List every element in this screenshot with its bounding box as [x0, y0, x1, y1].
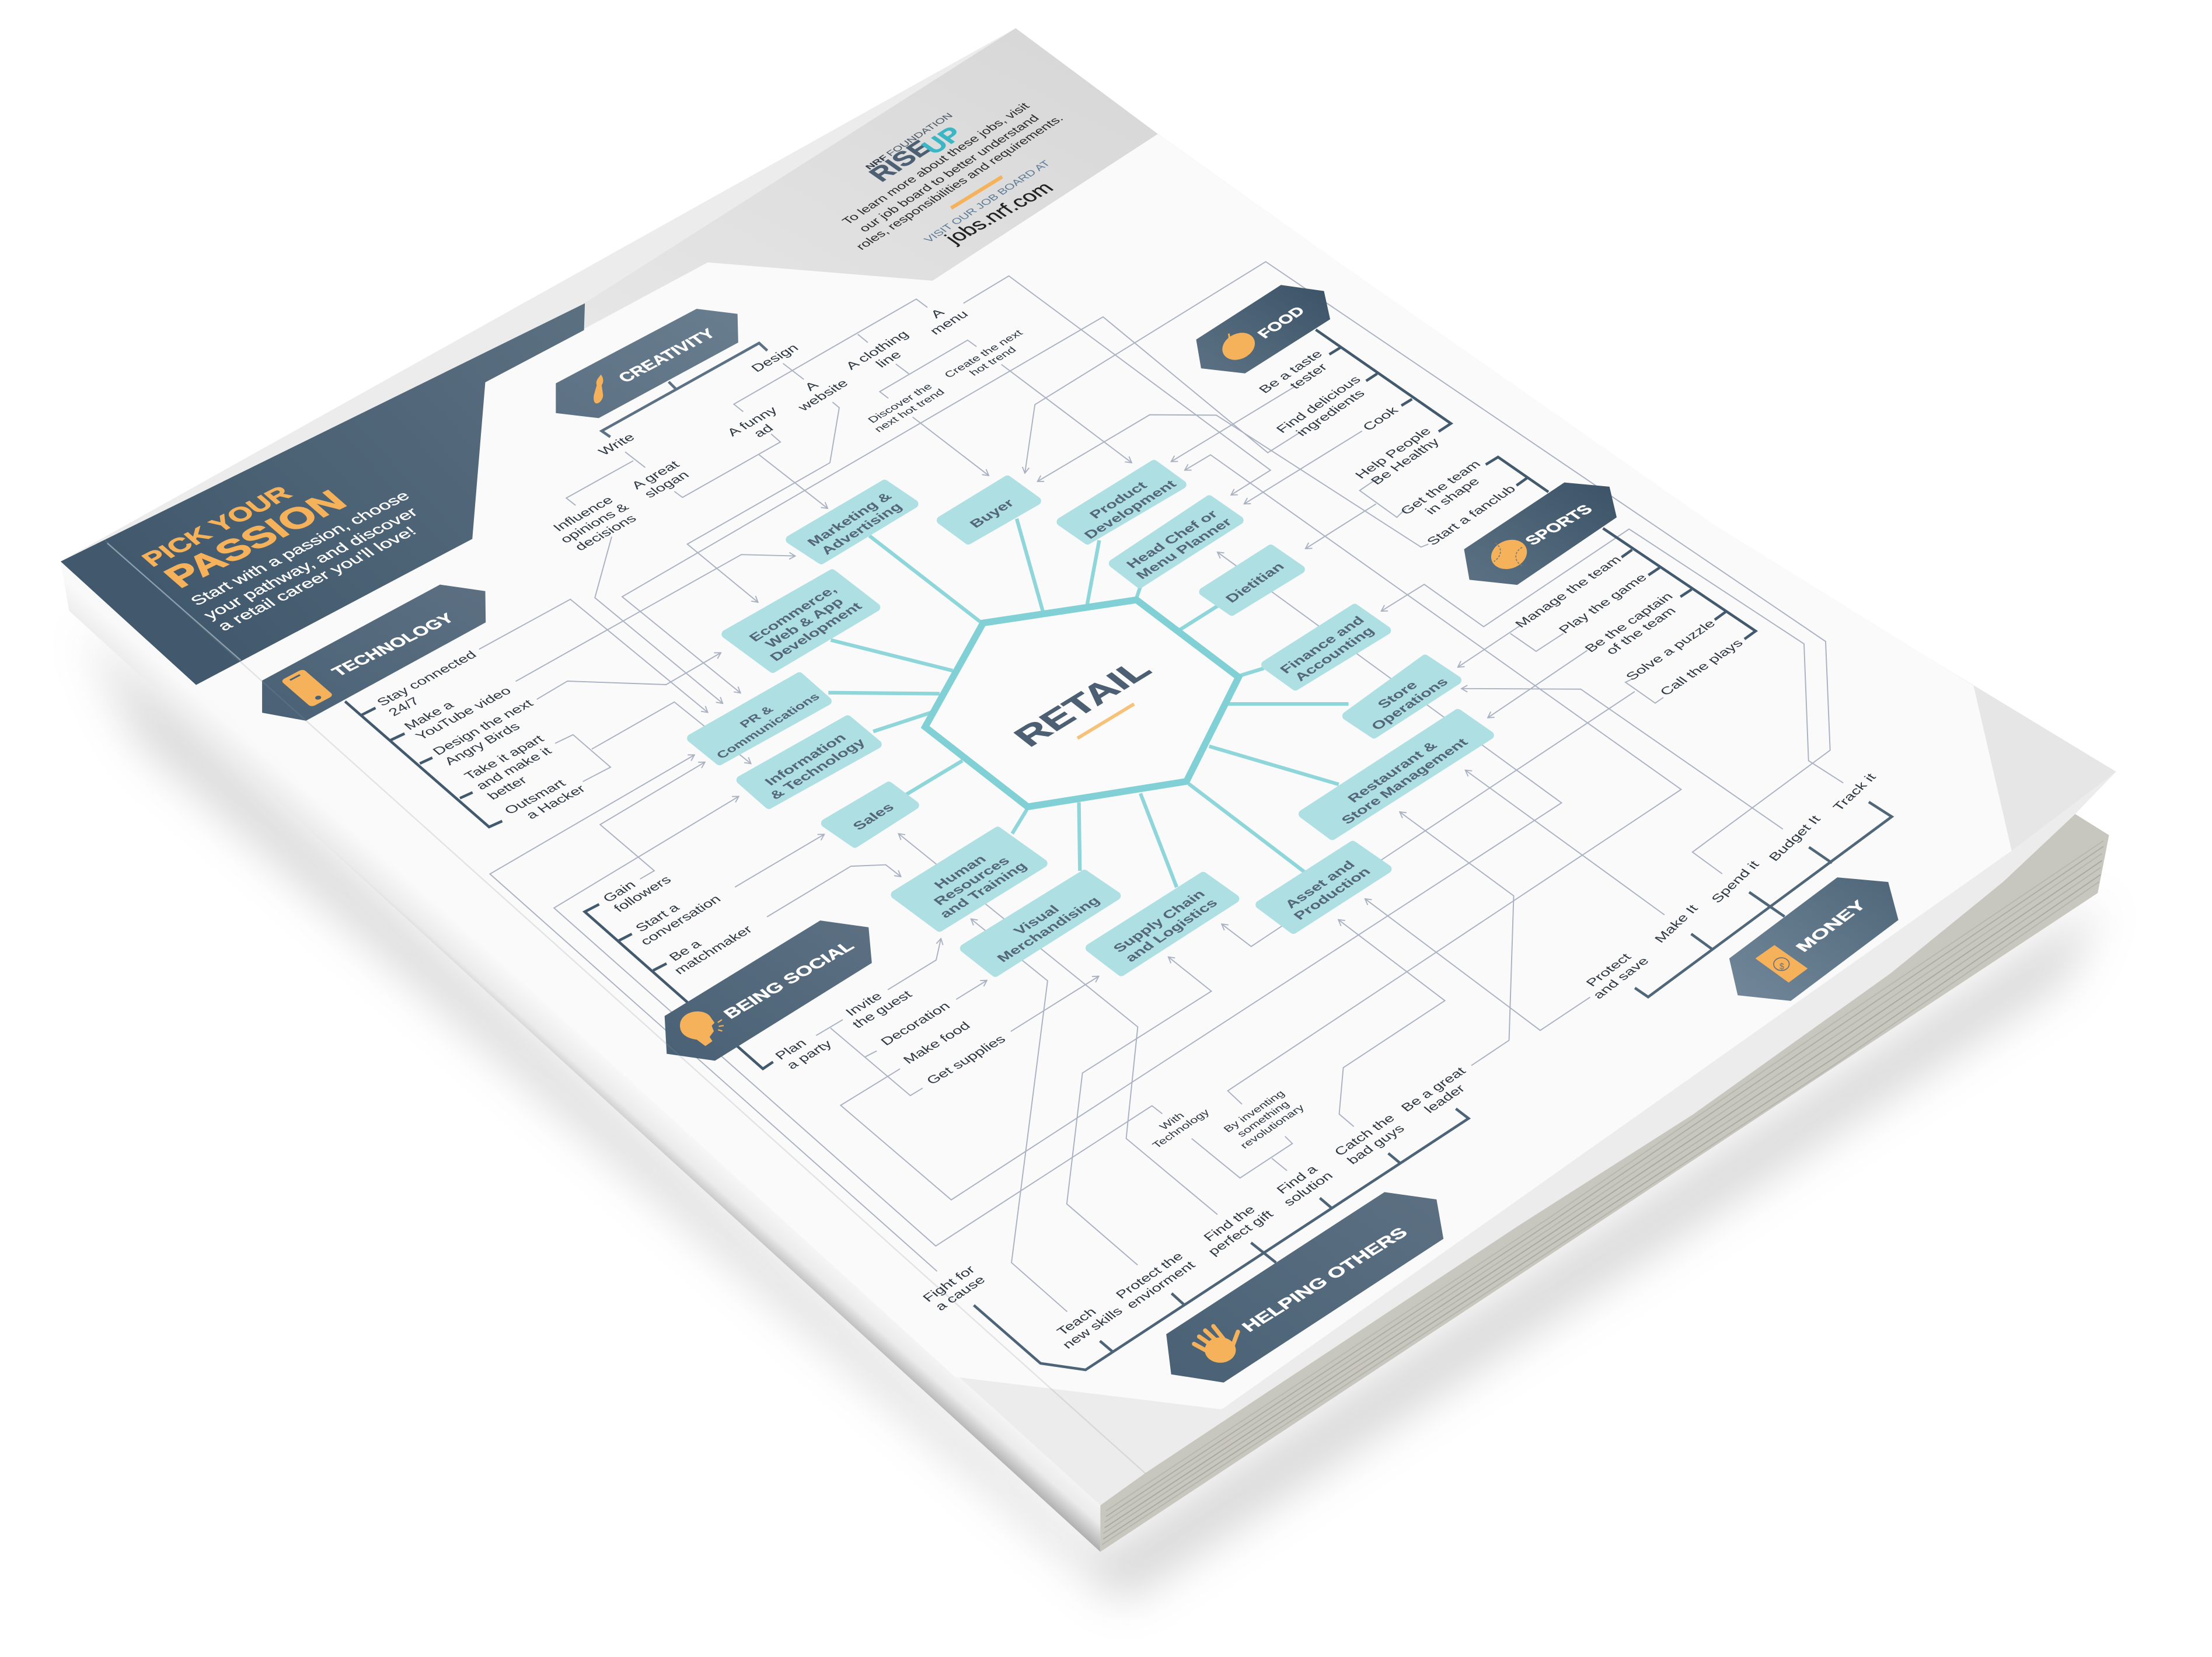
social ribbon: [665, 920, 872, 1061]
icon: apple: [1218, 327, 1259, 365]
career: sales: [825, 786, 915, 843]
item: fanclub: Start a fanclub: [1424, 483, 1519, 547]
heading: pick your: PICK YOUR: [136, 482, 297, 571]
arrow: plan a party branch: [816, 1020, 843, 1035]
item: stay connected: Stay connected: [374, 649, 480, 709]
arrow: trends bracket: [880, 340, 976, 398]
arrow: protect and save to asset: [1365, 899, 1590, 1030]
arrow: funny ad to marketing: [759, 455, 828, 508]
item: track it: Track it: [1830, 771, 1879, 814]
career: human resources: [895, 831, 1043, 927]
item: protect save: and save: [1590, 955, 1652, 1001]
career: supply chain: [1090, 876, 1235, 972]
spine crease: [105, 540, 1146, 1474]
career: buyer: [941, 480, 1037, 540]
career: marketing: Marketing &: [804, 490, 895, 549]
arrow: protect environment to supply chain: [1067, 957, 1212, 1265]
panel: being social: [585, 864, 1009, 1087]
arrow: angry birds to ecommerce: [537, 653, 721, 699]
item: invite: the guest: [849, 988, 915, 1031]
item: puzzle: Solve a puzzle: [1623, 618, 1719, 683]
arrow: find solution branch: [1272, 1159, 1287, 1171]
career boxes: [691, 464, 1489, 973]
career: PR and communications: PR &: [737, 704, 776, 730]
navy banner: [61, 304, 585, 685]
item: conversation: Start a: [633, 901, 683, 934]
panel: creativity: [546, 299, 1035, 555]
item: funny ad: A funny: [724, 404, 781, 439]
item: influence: opinions &: [557, 501, 632, 546]
item: matchmaker: Be a: [667, 938, 704, 964]
career: head chef: Head Chef or: [1124, 508, 1221, 571]
career: product development: Development: [1081, 478, 1180, 541]
item: influence: decisions: [572, 512, 640, 553]
arrow: manage to store operations: [1458, 625, 1520, 667]
item: slogan: slogan: [641, 469, 692, 500]
item: gift: Find the: [1201, 1203, 1258, 1244]
arrow: take apart to information: [592, 702, 751, 763]
helping ticks: [1100, 1153, 1401, 1351]
item: cook: Cook: [1360, 404, 1402, 433]
item: menu: A: [927, 306, 948, 320]
icon: banknote: $: [1780, 962, 1784, 972]
creativity ribbon: [556, 309, 738, 418]
career: store operations: [1346, 659, 1457, 734]
info paragraph line 2: our job board to better understand: [856, 113, 1042, 234]
banner description: Start with a passion, choose: [187, 489, 413, 608]
career: store operations: Store: [1374, 679, 1421, 711]
career: finance: Finance and: [1277, 614, 1367, 676]
job board url: jobs.nrf.com: [940, 179, 1058, 247]
item: captain: of the team: [1603, 605, 1679, 657]
item: supplies: Get supplies: [924, 1033, 1009, 1087]
heading: passion: PASSION: [156, 484, 355, 594]
arrow: conversation to sales: [735, 834, 824, 887]
item: take it apart: Take it apart: [462, 733, 547, 782]
career: information technology: Information: [762, 731, 849, 788]
career: ecommerce: [726, 574, 876, 669]
central hub spokes: [828, 519, 1348, 887]
arrow: great leader to restaurant: [1400, 812, 1514, 1066]
creativity tick: [669, 382, 676, 389]
item: funny ad: ad: [751, 423, 776, 439]
item: website: website: [794, 378, 852, 414]
arrow: clothing line branch: [858, 334, 868, 343]
item: followers: followers: [611, 874, 674, 915]
arrow: track it to finance: [1381, 529, 1843, 783]
item: clothing line: A clothing: [843, 329, 912, 372]
item: party: a party: [784, 1038, 836, 1072]
item: influence: Influence: [550, 494, 616, 534]
item: inventing: something: [1235, 1099, 1292, 1139]
career: product development: Product: [1087, 479, 1150, 521]
arrow: with technology to information: [554, 796, 1162, 1246]
corner shade: [1974, 686, 2116, 851]
item: play: Play the game: [1556, 572, 1651, 636]
item: spend it: Spend it: [1709, 859, 1763, 905]
arrow: write to influence: [566, 461, 633, 505]
arrow: by inventing to product development: [1185, 455, 1681, 1104]
banner text: pick your passion: [136, 482, 421, 634]
item: make food: Make food: [901, 1020, 974, 1066]
white content area: [196, 134, 2012, 1410]
item: ingredients: ingredients: [1293, 388, 1368, 438]
item: angry birds: Angry Birds: [441, 721, 524, 768]
arrow: invite guest to HR: [888, 939, 941, 990]
item: gift: perfect gift: [1205, 1208, 1276, 1258]
banner description line 2: your pathway, and discover: [200, 505, 421, 622]
logo: foundation word: FOUNDATION: [884, 111, 955, 158]
item: cause: a cause: [932, 1274, 989, 1313]
arrow: decoration tie: [866, 1051, 877, 1057]
technology ticks: [362, 708, 473, 798]
arrow: fight for a cause to PR: [490, 755, 937, 1271]
social bracket: [585, 904, 773, 1069]
arrow: healthy to dietitian: [1306, 504, 1376, 549]
arrow: manage and play bracket: [1510, 633, 1564, 651]
food heading: FOOD: [1254, 304, 1309, 341]
retail title: RETAIL: [1007, 654, 1159, 752]
item: write: Write: [595, 431, 638, 458]
arrow: budget to store operations: [1461, 689, 1783, 829]
career: asset and production: Asset and: [1282, 859, 1358, 911]
arrow: discover to buyer: [913, 417, 989, 476]
item: environment: Protect the: [1113, 1250, 1187, 1302]
connector lines and arrows: [479, 261, 1843, 1311]
arrow: delicious ingredients to PR: [622, 317, 1302, 693]
banner description line 3: a retail career you'll love!: [214, 524, 420, 634]
career: product development: [1061, 464, 1182, 541]
item: create: Create the next: [942, 328, 1025, 380]
item: taste tester: tester: [1287, 361, 1331, 391]
book shadow: [85, 628, 2102, 1601]
career: buyer: Buyer: [967, 497, 1017, 531]
career: supply chain: Supply Chain: [1110, 888, 1208, 955]
career: human resources: and Training: [937, 860, 1030, 920]
visit label: VISIT OUR JOB BOARD AT: [922, 159, 1053, 245]
item: slogan: A great: [629, 459, 683, 491]
item: decoration: Decoration: [878, 1000, 953, 1048]
item: taste tester: Be a taste: [1256, 348, 1326, 396]
icon: hand: [1194, 1326, 1238, 1363]
info paragraph line 1: To learn more about these jobs, visit: [839, 100, 1032, 226]
social ticks: [619, 934, 667, 971]
arrow: get supplies to supply chain: [1011, 976, 1099, 1031]
item: make it: Make It: [1652, 902, 1701, 946]
item: with technology: With: [1157, 1111, 1187, 1132]
career: ecommerce: Web & App: [762, 595, 847, 650]
item: stay connected: 24/7: [385, 695, 423, 718]
item: youtube: YouTube video: [413, 685, 514, 742]
career: finance: [1265, 608, 1387, 686]
item: take it apart: better: [484, 775, 531, 802]
arrow: menu to head chef: [964, 276, 1271, 495]
career: visual merchandising: [964, 874, 1117, 973]
arrow: design to website: [783, 364, 804, 379]
career: dietitian: Dietitian: [1223, 560, 1288, 605]
item: clothing line: line: [873, 349, 905, 370]
header block: RiseUp logo and job board: [839, 100, 1066, 252]
career: ecommerce: Ecommerce,: [746, 584, 840, 644]
logo: up: UP: [916, 123, 969, 158]
logo: NRF foundation: NRF: [864, 154, 890, 171]
arrow: create to product development: [1002, 364, 1132, 463]
item: healthy: Help People: [1352, 425, 1435, 481]
career: asset and production: Production: [1290, 866, 1374, 922]
creativity bracket: [602, 343, 767, 437]
item: cause: Fight for: [920, 1264, 978, 1304]
panel: technology: [262, 585, 589, 827]
icon: speaking head: [680, 1011, 724, 1046]
arrow: slogan to funny ad: [674, 434, 780, 497]
arrow: fanclub to buyer: [1038, 415, 1428, 547]
item: inventing: revolutionary: [1238, 1103, 1307, 1151]
page stack: [1100, 814, 2109, 1552]
item: ingredients: Find delicious: [1274, 374, 1364, 435]
sports ticks: [1621, 550, 1726, 620]
item: solution: Find a: [1274, 1163, 1321, 1196]
item: website: A: [802, 379, 822, 393]
item: menu: menu: [927, 308, 971, 337]
arrow: gain followers to PR: [600, 762, 705, 879]
career: dietitian: [1203, 549, 1301, 612]
item: take it apart: and make it: [473, 745, 555, 792]
item: budget it: Budget It: [1766, 813, 1824, 864]
item: create: hot trend: [967, 345, 1019, 378]
panel: helping others: [920, 1065, 1480, 1383]
arrow: spend it to buyer: [1025, 261, 1830, 874]
career: asset and production: [1259, 845, 1387, 930]
item: angry birds: Design the next: [430, 697, 536, 758]
retail underline: [1077, 704, 1134, 738]
creativity heading: CREATIVITY: [615, 326, 719, 385]
item: discover: Discover the: [866, 382, 935, 425]
arrow: clothing line to trends: [896, 364, 909, 374]
career: visual merchandising: Visual: [1011, 903, 1063, 937]
helping heading: HELPING OTHERS: [1238, 1224, 1411, 1335]
career: restaurant management: Restaurant &: [1345, 739, 1440, 805]
icon: ball: [1487, 535, 1531, 574]
panel: sports: [1397, 457, 1756, 698]
career: head chef: Menu Planner: [1133, 516, 1236, 582]
arrow: make it to restaurant: [1466, 770, 1665, 915]
career: information technology: & Technology: [766, 737, 868, 802]
item: with technology: Technology: [1150, 1107, 1212, 1150]
icon: phone: [281, 669, 334, 707]
item: outsmart: Outsmart: [501, 777, 569, 817]
item: inventing: By inventing: [1222, 1089, 1288, 1135]
money ribbon: [1729, 877, 1899, 1001]
career: finance: Accounting: [1292, 625, 1377, 683]
sports upper bracket: [1486, 457, 1548, 492]
item: solution: solution: [1281, 1170, 1336, 1209]
book spine side: [61, 561, 1100, 1552]
item: design: Design: [748, 342, 802, 375]
arrow: youtube to marketing: [515, 554, 796, 681]
money heading: MONEY: [1792, 898, 1870, 955]
career: visual merchandising: Merchandising: [994, 895, 1103, 965]
career: marketing: [790, 484, 914, 560]
arrow: taste tester to product development: [1171, 386, 1295, 462]
item: plays: Call the plays: [1657, 637, 1746, 698]
item: bad guys: bad guys: [1344, 1122, 1408, 1167]
item: team shape: in shape: [1422, 476, 1483, 517]
orange rule: [951, 177, 1002, 208]
social heading: BEING SOCIAL: [720, 938, 858, 1021]
arrow: decoration to visual merchandising: [956, 981, 987, 999]
item: skills: Teach: [1054, 1306, 1100, 1338]
arrow: captain to restaurant: [1488, 650, 1588, 718]
icon: paintbrush: [594, 375, 603, 403]
career: head chef: [1113, 500, 1239, 584]
money bracket: [1635, 802, 1892, 997]
arrow: stay connected to PR: [479, 599, 708, 713]
item: followers: Gain: [600, 878, 639, 905]
item: discover: next hot trend: [872, 387, 947, 434]
career: ecommerce: Development: [767, 600, 866, 664]
item: bad guys: Catch the: [1332, 1112, 1398, 1159]
career: restaurant management: Store Management: [1338, 736, 1471, 826]
panel: food: [1196, 285, 1451, 490]
item: outsmart: a Hacker: [523, 783, 589, 821]
arrow: solution bracket: [1192, 1136, 1292, 1178]
item: matchmaker: matchmaker: [671, 923, 755, 977]
arrow: website to ecommerce: [688, 402, 839, 602]
technology heading: TECHNOLOGY: [328, 611, 458, 679]
food ticks: [1330, 348, 1412, 406]
arrow: cook to head chef: [1244, 431, 1362, 504]
arrow: take apart bracket: [555, 735, 610, 782]
item: leader: Be a great: [1398, 1065, 1469, 1114]
arrow: teach to HR: [971, 919, 1067, 1311]
career: human resources: Human: [931, 853, 989, 891]
item: environment: enviorment: [1124, 1259, 1199, 1311]
central retail hexagon: [925, 600, 1238, 807]
technology bracket: [345, 702, 502, 827]
icon: banknote: [1756, 945, 1808, 983]
money ticks: [1691, 847, 1832, 950]
item: manage: Manage the team: [1512, 554, 1625, 630]
career: supply chain: and Logistics: [1122, 896, 1221, 964]
arrow: catch bad guys to asset: [1338, 920, 1445, 1126]
arrow: puzzle and plays bracket: [1625, 680, 1663, 703]
sports heading: SPORTS: [1521, 502, 1596, 548]
helping bracket: [974, 1109, 1468, 1370]
career: PR and communications: [691, 676, 828, 761]
arrow: make food to dietitian: [840, 552, 1561, 1200]
arrow: solve puzzle to supply chain: [1222, 692, 1635, 947]
item: conversation: conversation: [637, 893, 724, 948]
item: team shape: Get the team: [1397, 458, 1484, 517]
arrow: healthy bracket: [1360, 477, 1406, 517]
career: sales: Sales: [850, 801, 897, 832]
item: youtube: Make a: [401, 699, 458, 732]
item: healthy: Be Healthy: [1368, 436, 1443, 487]
item: captain: Be the captain: [1582, 591, 1676, 655]
career: human resources: Resources: [931, 854, 1013, 908]
food ribbon: [1196, 285, 1330, 374]
sports bracket: [1603, 528, 1756, 639]
career: marketing: Advertising: [818, 501, 905, 557]
item: invite: Invite: [843, 990, 885, 1018]
arrow: funny ad to menu: [734, 299, 927, 411]
grey header band: [585, 28, 1158, 328]
item: protect save: Protect: [1583, 951, 1635, 989]
sports upper tick: [1516, 477, 1527, 486]
panel: money: [1578, 771, 1899, 1001]
career: restaurant management: [1303, 713, 1489, 836]
logo: rise: RISE: [863, 136, 938, 186]
career: PR and communications: Communications: [714, 691, 822, 761]
arrow: write to slogan: [625, 452, 646, 468]
arrow: influence to PR: [595, 536, 723, 703]
info paragraph line 3: roles, responsibilities and requirements.: [853, 113, 1066, 252]
helping ribbon: [1166, 1192, 1443, 1383]
arrow: perfect gift to sales: [898, 833, 1217, 1215]
item: party: Plan: [772, 1037, 810, 1062]
arrow: party bracket: [831, 1028, 923, 1096]
food bracket: [1316, 330, 1451, 431]
technology ribbon: [262, 585, 486, 721]
sports ribbon: [1464, 483, 1617, 585]
career: information technology: [741, 720, 877, 805]
arrow: matchmaker to HR: [767, 865, 901, 917]
item: skills: new skills: [1060, 1305, 1126, 1351]
item: leader: leader: [1421, 1082, 1468, 1115]
career: store operations: Operations: [1368, 676, 1452, 732]
